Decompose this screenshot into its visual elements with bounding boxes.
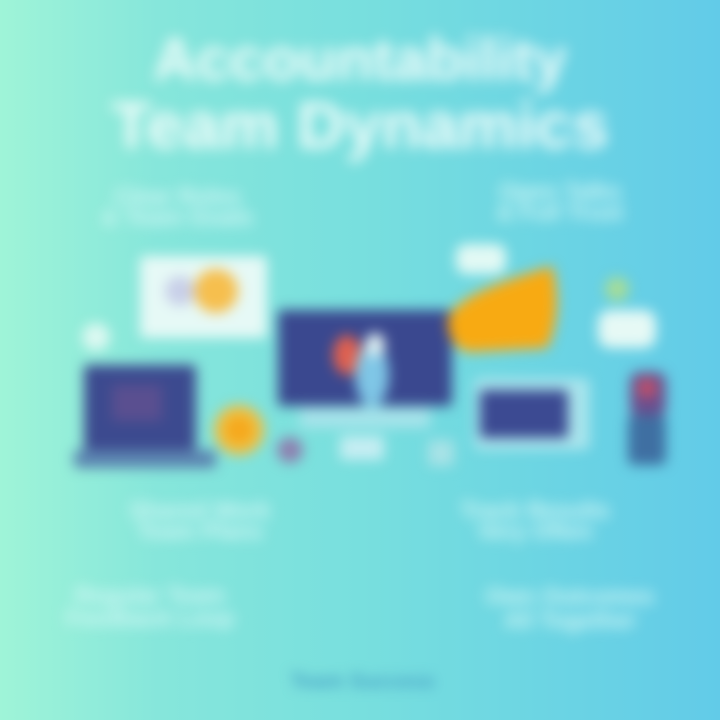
text block: middle left: Team Plans xyxy=(137,518,263,544)
title line 2: Team Dynamics xyxy=(111,88,609,162)
text block: top right xyxy=(492,176,628,227)
title xyxy=(106,26,614,170)
text block: bottom left: Feedback Loop xyxy=(66,605,234,631)
icon: orange coin xyxy=(214,405,264,455)
icon: standing person xyxy=(628,372,666,465)
text block: middle left: Shared Work xyxy=(129,497,271,523)
title line 1: Accountability xyxy=(153,26,567,93)
text block: bottom right xyxy=(481,582,658,638)
icon: laptop left xyxy=(74,365,216,468)
icon: orange speech shape xyxy=(448,266,557,352)
icon: white bubble top xyxy=(456,244,506,274)
text block: middle right: Very Often xyxy=(477,518,593,544)
icon: small white bubble left xyxy=(82,323,110,351)
text block: top left xyxy=(99,182,256,232)
text block: middle right: Track Results xyxy=(460,497,610,523)
text block: top left: & Team Goals xyxy=(102,204,253,230)
icon: white bubble right xyxy=(598,310,656,348)
text block: bottom left: Regular Team xyxy=(75,582,225,608)
footer text: Team Success xyxy=(290,670,435,693)
icon: white chart card xyxy=(140,256,267,338)
icon: tablet xyxy=(474,378,590,450)
text block: bottom left xyxy=(62,582,238,634)
text block: top right: Open Talks xyxy=(499,178,621,204)
icon: small figure bottom xyxy=(277,436,454,466)
text block: top left: Clear Roles xyxy=(114,183,241,209)
text block: bottom right: Own Outcomes xyxy=(486,583,654,609)
text block: top right: & Full Trust xyxy=(497,199,623,225)
text block: middle right xyxy=(458,496,614,548)
monitor with presenter xyxy=(278,310,452,428)
icon: small green marker xyxy=(605,277,629,301)
text block: middle left xyxy=(126,496,274,546)
text block: bottom right: All Together xyxy=(504,607,636,633)
